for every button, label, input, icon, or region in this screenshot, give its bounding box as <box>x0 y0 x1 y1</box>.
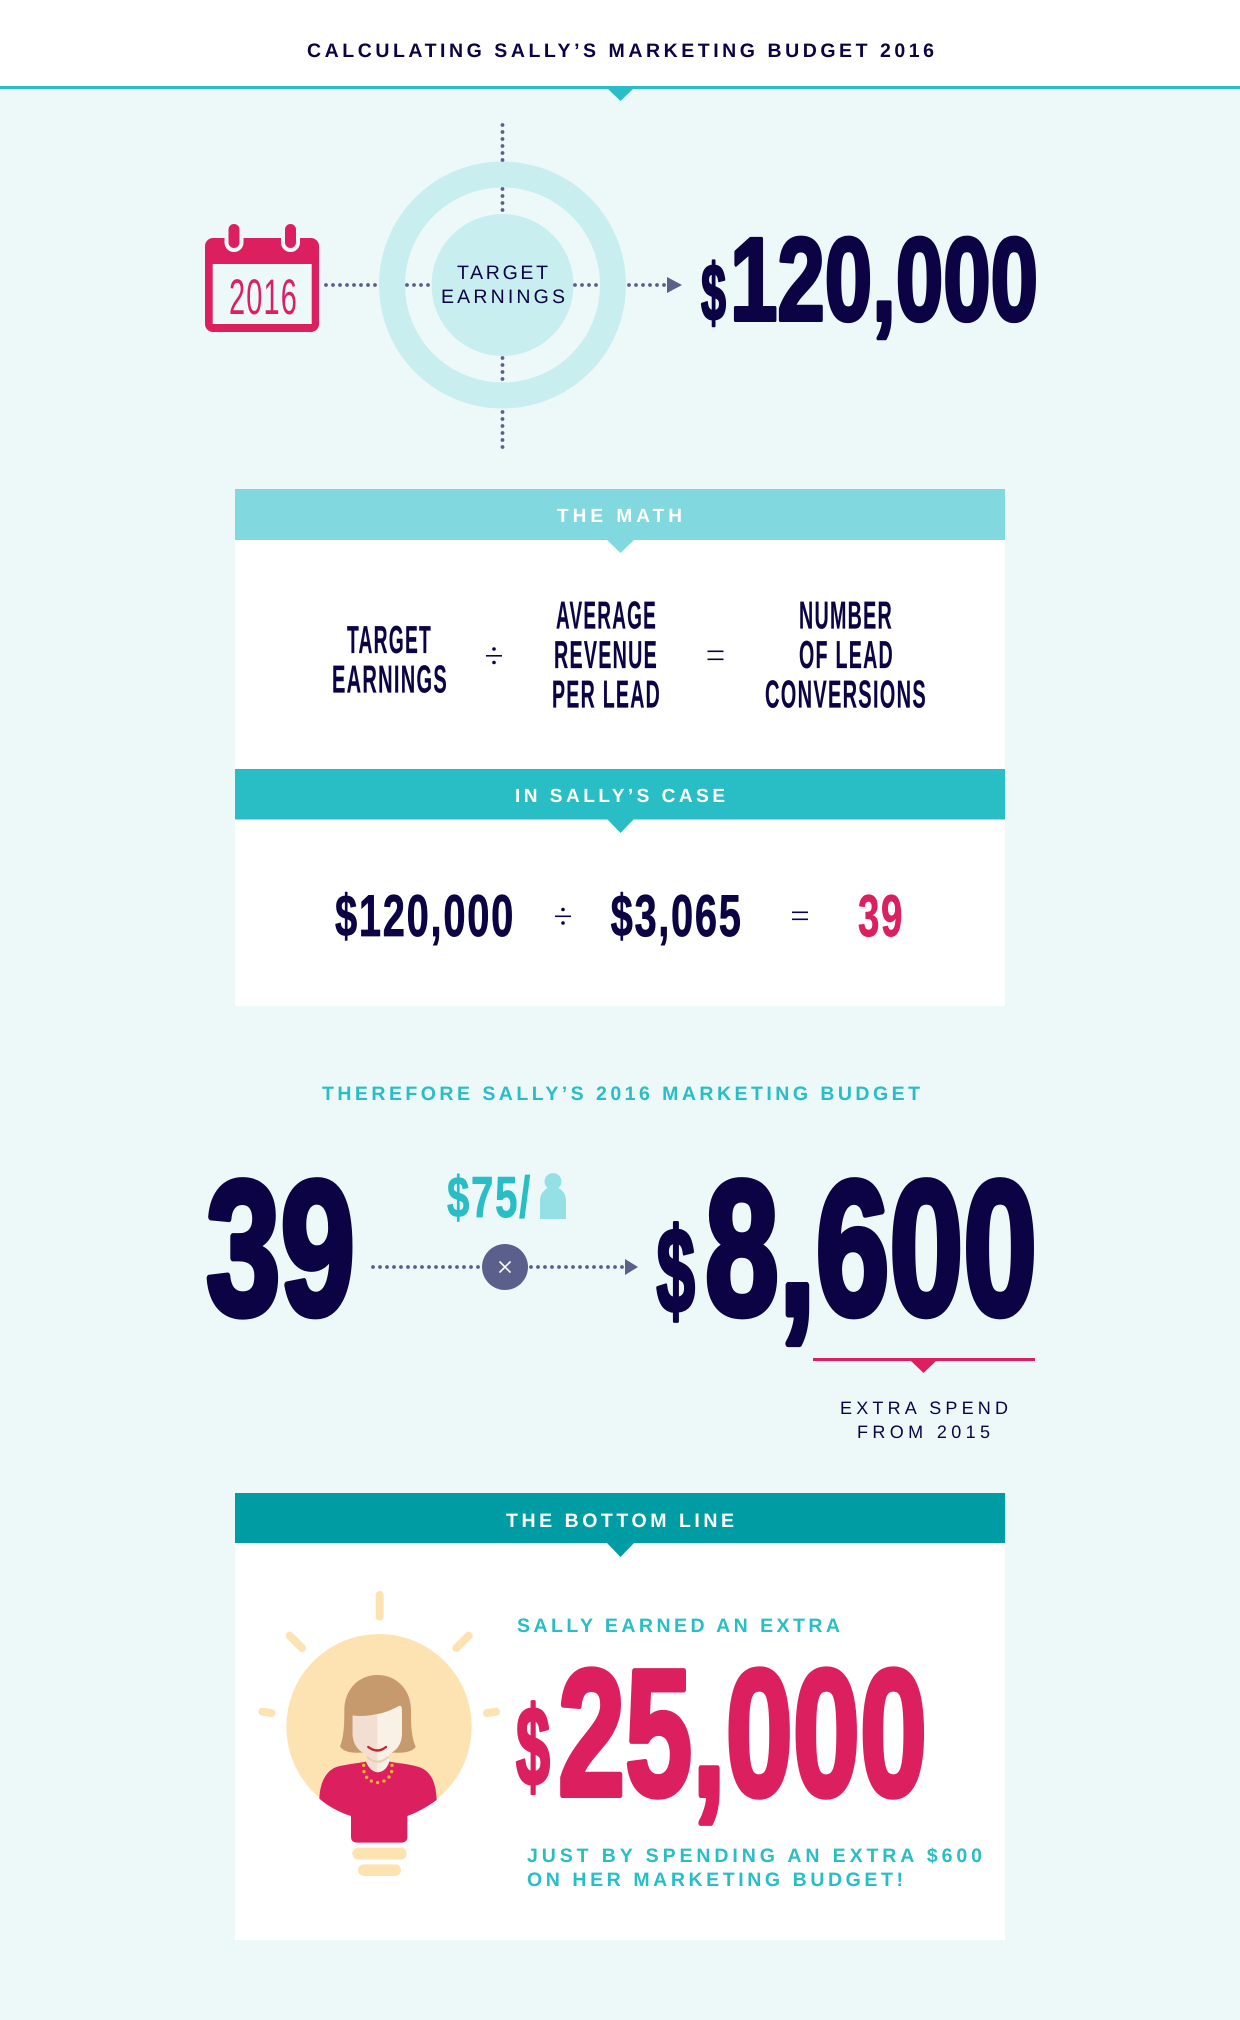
caption: extra spend: EXTRA SPEND <box>840 1398 1008 1418</box>
heading bar: in sally's case <box>235 769 1005 833</box>
big number: $25,000: $ <box>516 1684 550 1809</box>
heading bar: in sally's case: IN SALLY’S CASE <box>515 786 725 807</box>
operator: divide <box>486 647 502 664</box>
pink bracket marker <box>813 1358 1035 1373</box>
formula: target earnings <box>332 619 448 702</box>
heading bar: the math <box>235 489 1005 553</box>
circle label <box>441 262 565 308</box>
big number: $120,000 <box>701 214 1038 346</box>
marketing budget section <box>206 1083 1037 1442</box>
target earnings row <box>205 125 1038 448</box>
formula: target earnings: EARNINGS <box>332 658 448 702</box>
formula: average revenue per lead: PER LEAD <box>552 674 661 716</box>
big number: $8,600 <box>656 1142 1037 1355</box>
multiply connector <box>373 1244 638 1290</box>
text: just by spending: ON HER MARKETING BUDGET! <box>527 1869 903 1891</box>
big number: $120,000: 120,000 <box>730 214 1038 346</box>
operator: equals <box>792 912 808 920</box>
caption: extra spend: FROM 2015 <box>857 1422 990 1442</box>
text: sally earned an extra: SALLY EARNED AN EXTRA <box>517 1615 840 1637</box>
text: just by spending: JUST BY SPENDING AN EXTRA $600 <box>527 1845 982 1867</box>
heading bar: the bottom line <box>235 1493 1005 1557</box>
circle label: TARGET <box>457 262 548 284</box>
icon: calendar 2016 <box>205 222 319 332</box>
caption: extra spend <box>840 1398 1008 1442</box>
formula: number of lead conversions: NUMBER <box>799 594 893 638</box>
label: $75 per person: $75/ <box>447 1165 532 1230</box>
value: 39: 39 <box>858 883 904 949</box>
heading bar: the math: THE MATH <box>557 506 682 527</box>
title: CALCULATING SALLY’S MARKETING BUDGET 2016 <box>307 40 934 62</box>
big number: $25,000: 25,000 <box>558 1633 927 1834</box>
formula: target earnings: TARGET <box>347 619 432 662</box>
big number: 39: 39 <box>206 1142 355 1355</box>
heading bar: the bottom line: THE BOTTOM LINE <box>506 1510 734 1532</box>
formula: number of lead conversions: OF LEAD <box>799 634 894 677</box>
big number: $8,600: 8,600 <box>705 1142 1037 1355</box>
target circle diagram <box>326 125 682 448</box>
value: $120,000: $120,000 <box>335 883 515 949</box>
text: just by spending <box>527 1845 982 1891</box>
formula: average revenue per lead: REVENUE <box>554 634 658 677</box>
heading: therefore: THEREFORE SALLY’S 2016 MARKETING BUDGET <box>322 1083 920 1105</box>
illustration: woman in light bulb <box>262 1595 496 1876</box>
value: $3,065: $3,065 <box>611 883 743 949</box>
big number: $120,000: $ <box>701 248 726 337</box>
operator: equals <box>708 650 724 660</box>
operator: divide <box>555 908 571 925</box>
header band <box>0 0 1240 101</box>
panel: the bottom line <box>235 1493 1005 1940</box>
icon: calendar 2016: 2016 <box>229 269 298 325</box>
formula: average revenue per lead <box>552 594 661 716</box>
big number: $8,600: $ <box>656 1204 695 1338</box>
circle label: EARNINGS <box>441 286 565 308</box>
big number: $25,000 <box>516 1633 927 1834</box>
formula: number of lead conversions: CONVERSIONS <box>765 674 927 716</box>
panel: the math <box>235 489 1005 1006</box>
formula: average revenue per lead: AVERAGE <box>556 594 657 638</box>
icon: person <box>540 1173 566 1219</box>
formula: number of lead conversions <box>765 594 927 716</box>
